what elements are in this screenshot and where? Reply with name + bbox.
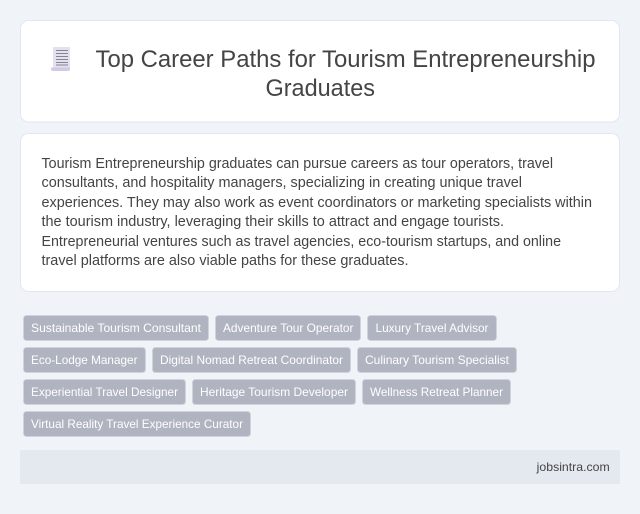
- footer source text: jobsintra.com: [536, 460, 610, 474]
- tag: Heritage Tourism Developer: Heritage Tourism Developer: [200, 385, 348, 399]
- text block: summary paragraph: [42, 156, 592, 269]
- text block: summary paragraph: travel platforms are also viable paths for these graduates.: [42, 253, 409, 269]
- title: Graduates: [266, 75, 375, 102]
- tag: Digital Nomad Retreat Coordinator: [152, 348, 350, 372]
- tag: Digital Nomad Retreat Coordinator: Digital Nomad Retreat Coordinator: [160, 353, 343, 367]
- title: Top Career Paths for Tourism Entrepreneurship: [96, 46, 596, 73]
- text block: summary paragraph: Tourism Entrepreneurship graduates can pursue careers as tour operators, travel: [42, 156, 553, 172]
- tag: Culinary Tourism Specialist: [358, 348, 516, 372]
- tag: Adventure Tour Operator: Adventure Tour Operator: [223, 321, 354, 335]
- tag list: career paths: [24, 316, 516, 436]
- tag: Sustainable Tourism Consultant: [24, 316, 208, 340]
- tag: Eco-Lodge Manager: [24, 348, 146, 372]
- tag: Wellness Retreat Planner: Wellness Retreat Planner: [370, 385, 503, 399]
- text block: summary paragraph: consultants, and hospitality managers, specializing in creating unique travel: [42, 175, 522, 191]
- tag: Adventure Tour Operator: [216, 316, 360, 340]
- text block: summary paragraph: the tourism industry, leveraging their skills to attract and engage tourists.: [42, 214, 504, 230]
- panel: header: [20, 20, 620, 122]
- tag: Culinary Tourism Specialist: Culinary Tourism Specialist: [365, 353, 510, 367]
- text block: summary paragraph: experiences. They may also work as event coordinators or marketing specialists within: [42, 195, 592, 211]
- tag: Virtual Reality Travel Experience Curator: [24, 412, 250, 436]
- title: [96, 46, 596, 102]
- panel: summary: [20, 134, 620, 292]
- text block: summary paragraph: Entrepreneurial ventures such as travel agencies, eco-tourism startups, and online: [42, 234, 561, 250]
- footer: [20, 450, 620, 484]
- tag: Luxury Travel Advisor: Luxury Travel Advisor: [376, 321, 488, 335]
- tag: Eco-Lodge Manager: Eco-Lodge Manager: [31, 353, 138, 367]
- tag: Wellness Retreat Planner: [362, 380, 510, 404]
- tag: Heritage Tourism Developer: [192, 380, 356, 404]
- tag: Sustainable Tourism Consultant: Sustainable Tourism Consultant: [31, 321, 202, 335]
- tag: Experiential Travel Designer: Experiential Travel Designer: [31, 385, 178, 399]
- tag: Virtual Reality Travel Experience Curator: Virtual Reality Travel Experience Curator: [31, 417, 243, 431]
- tag: Luxury Travel Advisor: [368, 316, 496, 340]
- icon: document scroll: [51, 47, 70, 71]
- tag: Experiential Travel Designer: [24, 380, 186, 404]
